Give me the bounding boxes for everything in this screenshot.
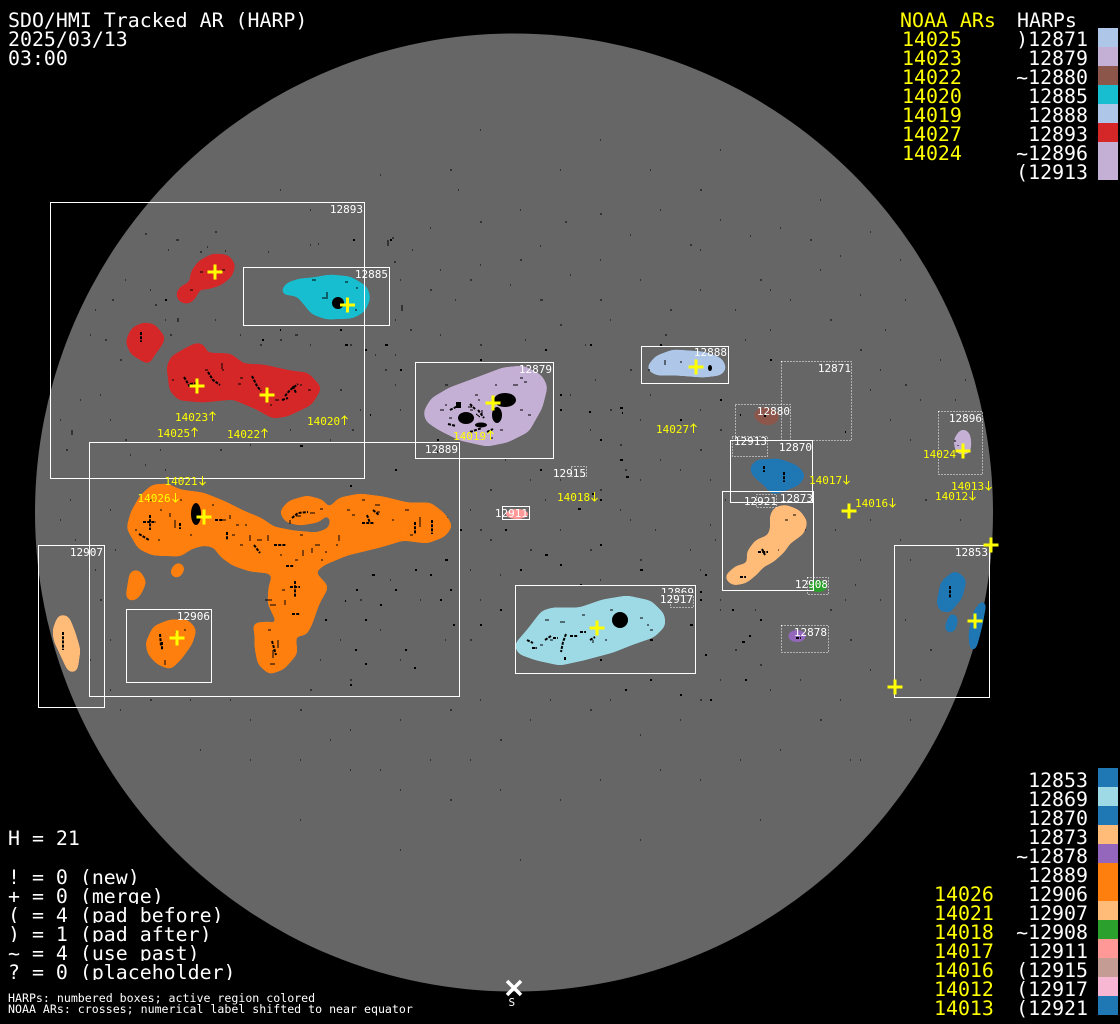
active region 12873 (peach) — [727, 507, 805, 583]
legend: top NOAA ARs column: 14027 — [902, 123, 962, 146]
legend: top HARPs column: 12893 — [1028, 123, 1088, 146]
NOAA AR labels: 14024 — [923, 448, 956, 461]
HARP box 12893: 12893 — [330, 203, 363, 216]
HARP box 12889: 12889 — [425, 443, 458, 456]
NOAA AR crosses — [170, 264, 998, 694]
legend: bottom colour swatches — [1098, 768, 1118, 1015]
NOAA AR labels: 14020 — [307, 415, 340, 428]
HARP box 12907: 12907 — [70, 546, 103, 559]
NOAA AR labels — [138, 411, 984, 510]
legend: bottom HARPs column: (12917 — [1016, 978, 1088, 1001]
HARP box 12911: 12911 — [495, 507, 528, 520]
legend: bottom NOAA ARs column: 14021 — [934, 902, 994, 925]
active region 12853 (blue) — [939, 573, 984, 650]
HARP box 12907 — [38, 546, 104, 708]
title block: 2025/03/13 — [8, 28, 128, 51]
caption: NOAA ARs: crosses; numerical label shifted to near equator — [8, 1002, 413, 1016]
legend: top HARPs column: )12871 — [1016, 28, 1088, 51]
legend: bottom HARPs column: 12853 — [1028, 769, 1088, 792]
NOAA AR labels: 14016 — [855, 497, 888, 510]
HARP box 12917: 12917 — [660, 593, 693, 606]
legend: bottom HARPs column: ~12878 — [1016, 845, 1088, 868]
active region 12896 (lilac) — [956, 431, 969, 452]
NOAA AR labels: 14017 — [809, 474, 842, 487]
HARP box 12879: 12879 — [519, 363, 552, 376]
HARP box 12913: 12913 — [734, 435, 767, 448]
active region 12888 (light blue) — [649, 352, 724, 375]
legend: top HARPs column: ~12880 — [1016, 66, 1088, 89]
legend: top HARPs column: (12913 — [1016, 161, 1088, 184]
HARP box 12853: 12853 — [955, 546, 988, 559]
legend: top HARPs column: 12885 — [1028, 85, 1088, 108]
legend: bottom HARPs column: ~12908 — [1016, 921, 1088, 944]
legend: bottom NOAA ARs column — [934, 883, 994, 1020]
legend: bottom HARPs column: 12869 — [1028, 788, 1088, 811]
legend: top HARPs column: HARPs — [1017, 9, 1077, 32]
title block: 03:00 — [8, 47, 68, 70]
statistics block — [0, 827, 250, 986]
HARP box 12889 — [90, 442, 460, 696]
legend: bottom HARPs column: (12921 — [1016, 997, 1088, 1020]
statistics block: ! = 0 (new) — [8, 866, 140, 889]
active region 12908 (green) — [809, 580, 827, 592]
legend: bottom NOAA ARs column: 14018 — [934, 921, 994, 944]
NOAA AR labels: 14019 — [453, 430, 486, 443]
active region 12889 (orange) — [128, 486, 450, 672]
legend: bottom NOAA ARs column: 14013 — [934, 997, 994, 1020]
HARP box 12921: 12921 — [744, 495, 777, 508]
NOAA AR labels: 14025 — [157, 427, 190, 440]
legend: top NOAA ARs column: 14025 — [902, 28, 962, 51]
NOAA AR labels: 14012 — [935, 490, 968, 503]
HARP box 12880 — [736, 404, 790, 440]
HARP box 12878 — [782, 626, 828, 652]
active region 12878 (purple) — [788, 630, 806, 642]
HARP box 12871 — [782, 362, 852, 440]
legend: top HARPs column — [1016, 9, 1088, 184]
clustered plage specks — [165, 240, 846, 700]
legend: top NOAA ARs column: 14022 — [902, 66, 962, 89]
broken sunspot strands — [63, 332, 950, 661]
legend: top colour swatches — [1098, 28, 1118, 180]
legend: top NOAA ARs column: 14023 — [902, 47, 962, 70]
NOAA AR latitude arrows — [172, 412, 992, 507]
plage detail specks inside regions — [135, 270, 958, 665]
statistics block: + = 0 (merge) — [8, 885, 164, 908]
HARP box 12896: 12896 — [949, 412, 982, 425]
NOAA AR labels: 14027 — [656, 423, 689, 436]
statistics block: ( = 4 (pad before) — [8, 904, 224, 927]
HARP box 12869: 12869 — [661, 586, 694, 599]
active region 12880 (brown) — [755, 409, 778, 423]
active region 12907 (peach) — [55, 617, 78, 670]
caption — [8, 991, 413, 1016]
active region 12870 (blue) — [752, 461, 803, 492]
legend: bottom HARPs column — [1016, 769, 1088, 1020]
statistics block: ~ = 4 (use past) — [8, 942, 200, 965]
legend: bottom HARPs column: (12915 — [1016, 959, 1088, 982]
HARP box 12893 — [50, 202, 364, 478]
caption: HARPs: numbered boxes; active region colored — [8, 991, 315, 1005]
legend: bottom NOAA ARs column: 14016 — [934, 959, 994, 982]
legend: top NOAA ARs column: NOAA ARs — [900, 9, 996, 32]
active region 12885 (cyan) — [283, 277, 368, 317]
NOAA AR labels: 14018 — [557, 491, 590, 504]
HARP box 12853 — [894, 546, 990, 698]
NOAA AR labels: 14013 — [951, 480, 984, 493]
legend: top HARPs column: ~12896 — [1016, 142, 1088, 165]
HARP box 12873 — [722, 492, 814, 590]
HARP box 12913 — [732, 435, 768, 456]
south pole marker — [507, 981, 521, 1009]
south pole marker: S — [508, 996, 515, 1009]
legend: bottom HARPs column: 12873 — [1028, 826, 1088, 849]
legend: bottom HARPs column: 12870 — [1028, 807, 1088, 830]
legend: bottom NOAA ARs column: 14012 — [934, 978, 994, 1001]
HARP box 12908: 12908 — [795, 578, 828, 591]
legend: bottom HARPs column: 12906 — [1028, 883, 1088, 906]
legend: top NOAA ARs column: 14020 — [902, 85, 962, 108]
legend: bottom NOAA ARs column: 14026 — [934, 883, 994, 906]
scattered sunspot specks — [60, 130, 981, 860]
legend: top NOAA ARs column: 14019 — [902, 104, 962, 127]
legend: bottom HARPs column: 12889 — [1028, 864, 1088, 887]
legend: bottom HARPs column: 12911 — [1028, 940, 1088, 963]
HARP box 12906: 12906 — [177, 610, 210, 623]
NOAA AR labels: 14026 — [138, 492, 171, 505]
statistics block: H = 21 — [8, 827, 80, 850]
HARP box 12869 — [516, 586, 696, 674]
legend: bottom HARPs column: 12907 — [1028, 902, 1088, 925]
title block: SDO/HMI Tracked AR (HARP) — [8, 9, 307, 32]
HARP box 12888: 12888 — [694, 346, 727, 359]
legend: top HARPs column: 12879 — [1028, 47, 1088, 70]
HARP box 12885 — [244, 268, 390, 326]
sunspot masses inside active regions — [191, 297, 712, 628]
legend: top HARPs column: 12888 — [1028, 104, 1088, 127]
HARP box 12880: 12880 — [757, 405, 790, 418]
HARP box 12885: 12885 — [355, 268, 388, 281]
HARP box 12871: 12871 — [818, 362, 851, 375]
active region 12879 (lilac) — [426, 368, 545, 444]
HARP box 12906 — [126, 610, 212, 682]
HARP box 12873: 12873 — [780, 492, 813, 505]
HARP box 12878: 12878 — [794, 626, 827, 639]
HARP box 12888 — [642, 346, 728, 384]
legend: top NOAA ARs column — [900, 9, 996, 165]
active region 12893 (red) — [128, 256, 319, 416]
HARP box 12896 — [938, 412, 982, 474]
HARP box 12879 — [416, 362, 554, 458]
statistics block: ? = 0 (placeholder) — [8, 961, 236, 984]
NOAA AR labels: 14022 — [227, 428, 260, 441]
statistics block: ) = 1 (pad after) — [8, 923, 212, 946]
title block — [8, 9, 307, 70]
HARP box 12870: 12870 — [779, 441, 812, 454]
HARP box 12870 — [730, 440, 812, 502]
NOAA AR labels: 14023 — [175, 411, 208, 424]
NOAA AR labels: 14021 — [164, 475, 198, 488]
active region 12911 (pink) — [506, 509, 528, 519]
active region 12869 (pale cyan) — [517, 598, 663, 663]
active region 12906 (orange) — [148, 622, 194, 667]
HARP box 12915: 12915 — [553, 467, 586, 480]
legend: bottom NOAA ARs column: 14017 — [934, 940, 994, 963]
legend: top NOAA ARs column: 14024 — [902, 142, 962, 165]
